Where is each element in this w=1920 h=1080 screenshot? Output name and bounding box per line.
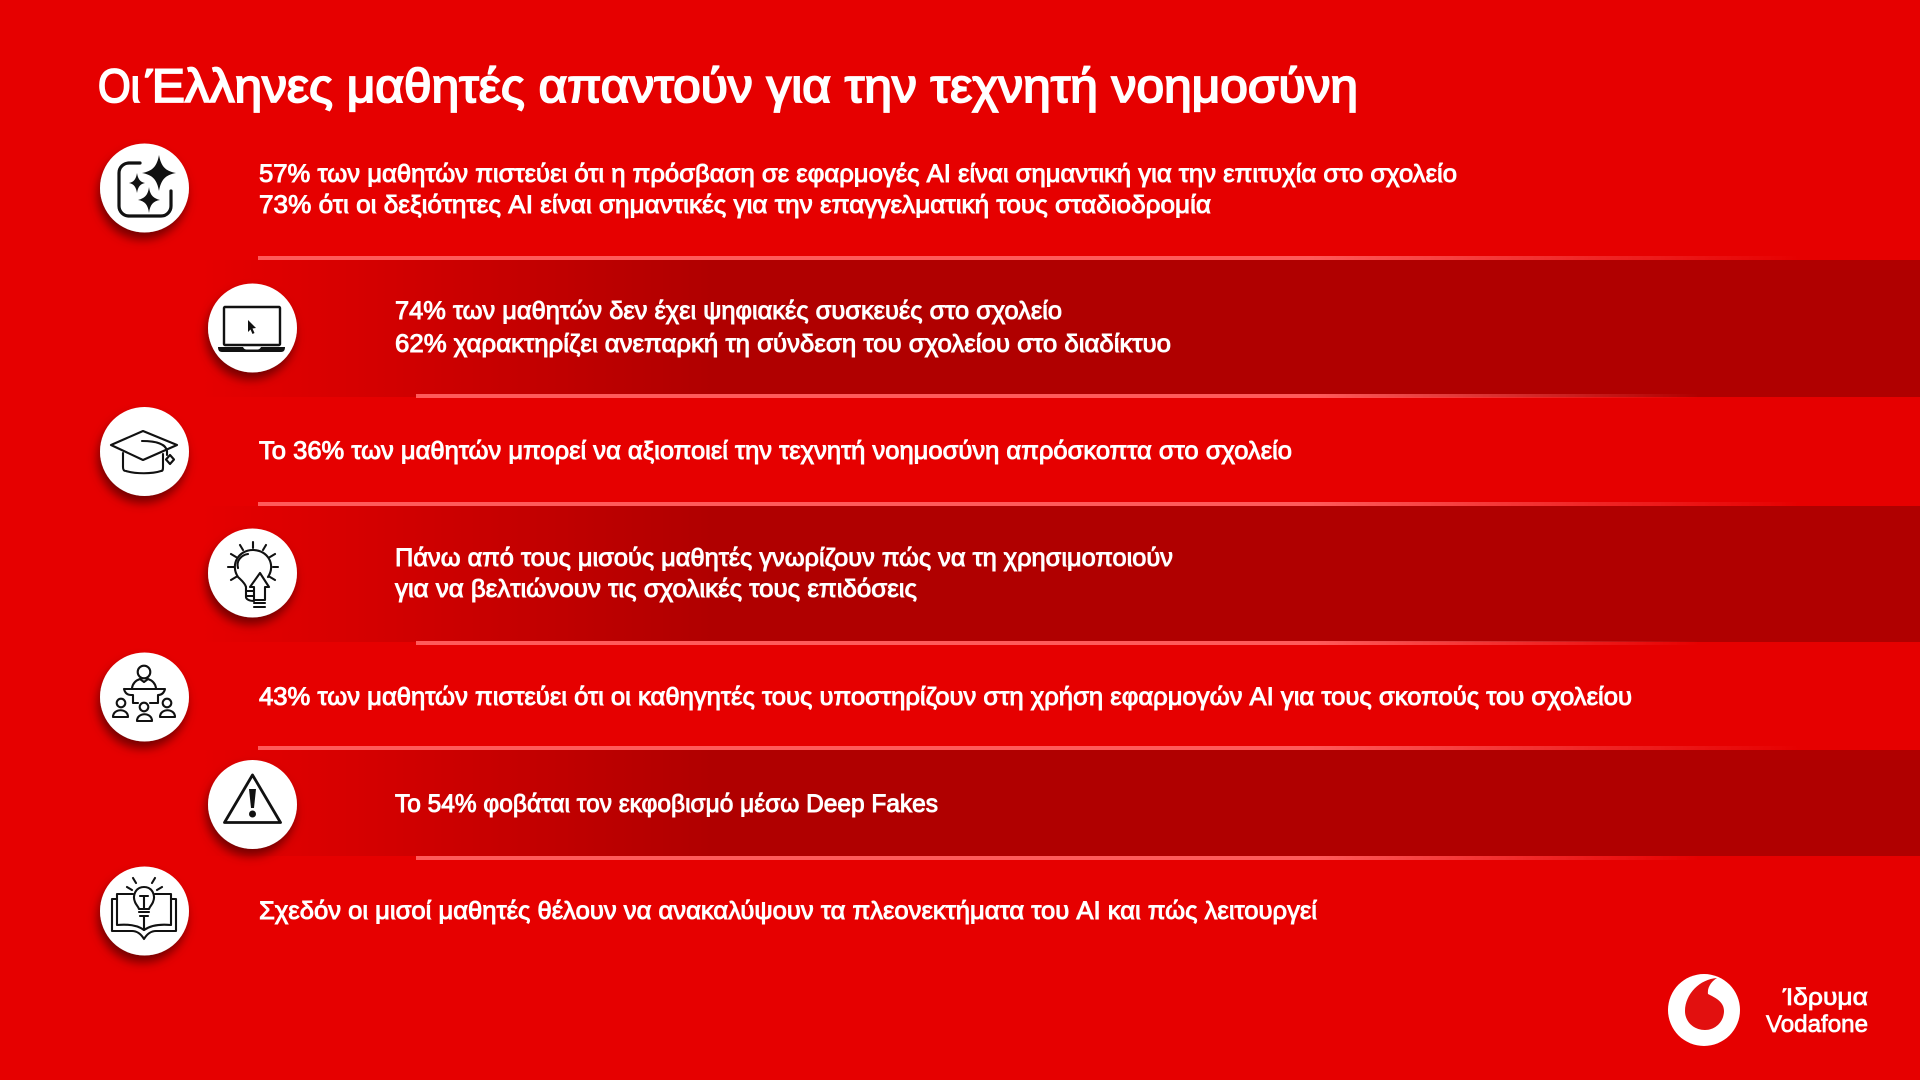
- row 2: devices: [208, 284, 1171, 372]
- title: Έλληνες μαθητές απαντούν για την τεχνητή νοημοσύνη: [145, 59, 1358, 112]
- icon: graduation cap: [100, 407, 189, 496]
- title: Οι: [98, 59, 140, 112]
- text: row 4: για να βελτιώνουν τις σχολικές τους επιδόσεις: [395, 575, 917, 603]
- logo text: Ίδρυμα: [1782, 984, 1868, 1011]
- text: row 1: [259, 160, 1457, 219]
- text: row 4: [395, 544, 1173, 603]
- row 4: performance: [208, 528, 1173, 618]
- text: row 2: [395, 297, 1171, 358]
- text: row 2: 62% χαρακτηρίζει ανεπαρκή τη σύνδεση του σχολείου στο διαδίκτυο: [395, 330, 1171, 358]
- row 1: AI importance: [100, 144, 1457, 232]
- icon: warning triangle: [208, 760, 297, 849]
- text: row 1: 57% των μαθητών πιστεύει ότι η πρόσβαση σε εφαρμογές AI είναι σημαντική για την επιτυχία στο σχολείο: [259, 160, 1457, 188]
- logo text: [1766, 984, 1868, 1038]
- text: row 1: 73% ότι οι δεξιότητες AI είναι σημαντικές για την επαγγελματική τους σταδιοδρομία: [259, 191, 1211, 219]
- text: row 4: Πάνω από τους μισούς μαθητές γνωρίζουν πώς να τη χρησιμοποιούν: [395, 544, 1173, 572]
- text: row 3: Το 36% των μαθητών μπορεί να αξιοποιεί την τεχνητή νοημοσύνη απρόσκοπτα στο σχολείο: [259, 437, 1292, 465]
- dark band 2: [200, 506, 1920, 642]
- logo mark: [1668, 974, 1740, 1046]
- icon: sparkles: [100, 144, 189, 232]
- row 7: curiosity: [100, 866, 1317, 956]
- row 6: deep fakes: [208, 760, 938, 849]
- text: row 2: 74% των μαθητών δεν έχει ψηφιακές συσκευές στο σχολείο: [395, 297, 1062, 325]
- text: row 7: Σχεδόν οι μισοί μαθητές θέλουν να ανακαλύψουν τα πλεονεκτήματα του AI και πώς λειτουργεί: [259, 897, 1317, 925]
- dark band 3: [200, 750, 1920, 856]
- icon: light bulb with arrow: [208, 528, 297, 618]
- icon: teacher and students: [100, 652, 189, 742]
- logo text: Vodafone: [1766, 1011, 1868, 1038]
- logo: Vodafone Foundation: [1668, 974, 1868, 1046]
- text: row 5: 43% των μαθητών πιστεύει ότι οι καθηγητές τους υποστηρίζουν στη χρήση εφαρμογών AI για τους σκοπούς του σχολείου: [259, 683, 1632, 711]
- icon: open book with bulb: [100, 866, 189, 956]
- row 5: teachers: [100, 652, 1632, 742]
- icon: laptop: [208, 284, 297, 372]
- row 3: use of AI: [100, 407, 1292, 496]
- text: row 6: Το 54% φοβάται τον εκφοβισμό μέσω Deep Fakes: [395, 790, 938, 818]
- dark band 1: [200, 260, 1920, 397]
